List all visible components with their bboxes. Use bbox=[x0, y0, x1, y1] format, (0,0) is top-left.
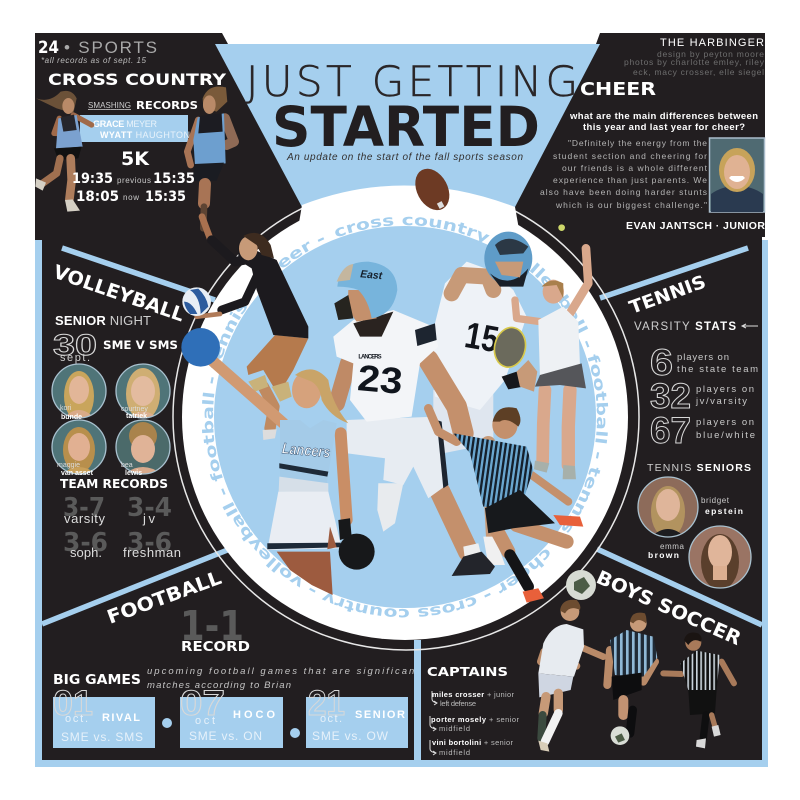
quote: which is our biggest challenge." bbox=[555, 200, 707, 210]
design credit: design by peyton moore bbox=[657, 49, 764, 59]
stat: 6 players: 6 bbox=[650, 342, 673, 383]
times: now: now bbox=[123, 193, 139, 202]
date month: sept. bbox=[60, 352, 90, 364]
heading: football: FOOTBALL bbox=[104, 567, 224, 629]
sports count: 24 bbox=[38, 38, 59, 58]
tennis player bbox=[491, 248, 588, 479]
times: previous: 19:35 bbox=[72, 171, 113, 187]
blue divider: tennis bbox=[600, 248, 748, 298]
white arc under wedge bbox=[297, 185, 520, 235]
question: what are the main differences between bbox=[569, 111, 758, 122]
player group: soccer team bbox=[538, 600, 734, 752]
headshot captions: kori bbox=[60, 405, 72, 412]
question: this year and last year for cheer? bbox=[583, 122, 745, 133]
game card: rival: 01 bbox=[53, 684, 93, 723]
stat: 67 players: players on bbox=[696, 417, 754, 428]
name: bridget epstein: bridget bbox=[701, 496, 730, 505]
record grid: jv bbox=[142, 511, 156, 526]
record grid: 3-6 bbox=[127, 528, 172, 558]
headshot captions bbox=[57, 405, 148, 477]
stat: 32 players: 32 bbox=[650, 377, 691, 416]
headshot captions: lewis bbox=[125, 470, 142, 477]
date number: 30 bbox=[53, 329, 97, 362]
times: previous: previous bbox=[117, 176, 151, 185]
stat: 6 players: players on bbox=[677, 352, 729, 363]
heading: cross country: CROSS COUNTRY bbox=[48, 70, 226, 89]
varsity stats: VARSITY STATS bbox=[634, 321, 736, 333]
name: emma brown: brown bbox=[648, 550, 679, 560]
stat: 32 players: players on bbox=[696, 384, 754, 395]
description: upcoming football games that are significant bbox=[147, 666, 419, 677]
heading: captains: CAPTAINS bbox=[427, 664, 508, 679]
blue divider: football bbox=[42, 547, 235, 624]
names bar bbox=[80, 115, 188, 142]
football player 23: East bbox=[360, 268, 383, 282]
headshot: bridget epstein bbox=[638, 477, 698, 538]
record grid: 3-7 bbox=[63, 493, 105, 523]
heading: team records: TEAM RECORDS bbox=[60, 476, 168, 491]
record grid bbox=[63, 493, 181, 560]
center photo collage bbox=[181, 163, 588, 603]
quote: our friends is a whole different bbox=[562, 163, 708, 173]
headshot captions: bea bbox=[121, 462, 133, 469]
connector dot bbox=[162, 718, 172, 728]
game card: hoco: SME vs. ON bbox=[189, 729, 262, 743]
captain: vini bortolini: midfield bbox=[439, 748, 470, 757]
times: previous: 15:35 bbox=[153, 171, 195, 187]
captain: miles crosser: miles crosser + junior bbox=[432, 690, 514, 699]
times: previous bbox=[72, 171, 195, 187]
heading: cheer: CHEER bbox=[580, 79, 656, 100]
outer ring line bbox=[173, 184, 639, 650]
blue divider: boys soccer bbox=[597, 549, 762, 625]
photo credit line 2: eck, macy crosser, elle siegel bbox=[633, 67, 764, 77]
title: started: STARTED bbox=[272, 95, 540, 159]
record grid: 3-6 bbox=[63, 528, 108, 558]
heading: tennis: TENNIS bbox=[627, 272, 709, 319]
quote: student section and cheering for bbox=[553, 151, 707, 161]
headshot captions: tatriek bbox=[126, 413, 147, 420]
senior night: SENIOR NIGHT bbox=[55, 313, 151, 328]
headshot: tatriek bbox=[116, 364, 170, 418]
soccer ball bbox=[566, 570, 596, 600]
headshot: lewis bbox=[116, 420, 170, 474]
arrow bbox=[742, 324, 758, 328]
record grid: 3-4 bbox=[127, 493, 172, 523]
sports label: • SPORTS bbox=[64, 38, 157, 57]
connector dot bbox=[290, 728, 300, 738]
blue inner circle bbox=[214, 226, 596, 608]
football player 23: 23 bbox=[356, 357, 404, 402]
title: just getting: JUST GETTING bbox=[246, 57, 578, 106]
name: emma brown bbox=[648, 542, 685, 560]
photo: evan jantsch bbox=[710, 138, 764, 212]
stat: 6 players: the state team bbox=[677, 364, 758, 375]
game card: rival bbox=[53, 684, 155, 748]
stat: 67 players: blue/white bbox=[696, 430, 755, 441]
blue divider: captains bbox=[414, 640, 421, 765]
name: bridget epstein bbox=[701, 496, 743, 516]
subtitle: An update on the start of the fall sports season bbox=[286, 152, 523, 163]
heading: boys soccer: BOYS SOCCER bbox=[593, 566, 745, 650]
player in blue stripes bbox=[607, 613, 657, 745]
times: now: 15:35 bbox=[145, 189, 186, 205]
matchup: SME V SMS bbox=[103, 338, 178, 352]
records note: *all records as of sept. 15 bbox=[41, 56, 147, 65]
captain: miles crosser: left defense bbox=[440, 699, 476, 708]
stat: 32 players bbox=[650, 377, 754, 416]
quarterback 15: 15 bbox=[462, 314, 502, 360]
cheerleader: Lancers bbox=[281, 440, 331, 462]
blue divider: volleyball bbox=[62, 248, 215, 300]
panel: football bbox=[53, 567, 419, 748]
game card: rival: oct. bbox=[65, 713, 88, 725]
smashing records: SMASHING bbox=[88, 101, 131, 110]
game card: rival: RIVAL bbox=[102, 712, 140, 724]
captain: vini bortolini: vini bortolini + senior bbox=[432, 738, 514, 747]
heading: tennis seniors: TENNIS SENIORS bbox=[647, 462, 751, 474]
football player 23 bbox=[333, 262, 495, 576]
blue header wedge bbox=[215, 44, 600, 207]
headshot captions: van asset bbox=[61, 470, 94, 477]
name: grace meyer: GRACE MEYER bbox=[93, 119, 158, 129]
headshot: emma brown bbox=[689, 526, 751, 590]
stat: 67 players: 67 bbox=[650, 410, 691, 451]
headshot: van asset bbox=[52, 420, 106, 474]
heading: volleyball: VOLLEYBALL bbox=[50, 261, 187, 326]
attribution: EVAN JANTSCH · JUNIOR bbox=[626, 220, 765, 232]
headshot captions: bunde bbox=[61, 414, 82, 421]
record grid: freshman bbox=[123, 545, 181, 560]
captain: porter mosely: midfield bbox=[439, 724, 470, 733]
quote: also have been doing harder stunts bbox=[540, 187, 707, 197]
stat: 32 players: jv/varsity bbox=[695, 396, 747, 407]
white circle bbox=[182, 194, 628, 640]
name: emma brown: emma bbox=[660, 542, 685, 551]
soccer player 8 bbox=[428, 407, 583, 603]
publication name: THE HARBINGER bbox=[660, 37, 764, 49]
captain: porter mosely bbox=[430, 715, 520, 733]
game card: hoco: oct bbox=[195, 715, 215, 727]
captain: vini bortolini bbox=[430, 738, 514, 757]
quote: "Definitely the energy from the bbox=[568, 138, 707, 148]
stat: 6 players bbox=[650, 342, 758, 383]
record label: RECORD bbox=[181, 639, 250, 655]
blue frame bbox=[35, 240, 768, 767]
headshot: bunde bbox=[52, 364, 106, 418]
quote bbox=[540, 138, 708, 210]
times: now bbox=[76, 189, 186, 205]
game card: rival: SME vs. SMS bbox=[61, 730, 143, 744]
records word: RECORDS bbox=[136, 100, 198, 112]
description: matches according to Brian bbox=[147, 680, 291, 691]
runner right bbox=[187, 86, 234, 228]
panel: boys soccer bbox=[427, 566, 745, 757]
football in the air bbox=[408, 163, 456, 216]
tennis ball bbox=[558, 224, 565, 231]
ring text: sports names: cross country - volleyball - football - tennis - cheer - cross country - volleyball - football - tennis - cheer - bbox=[202, 216, 608, 618]
game card: senior: SME vs. OW bbox=[312, 729, 389, 743]
panel: tennis bbox=[627, 272, 758, 590]
title block bbox=[246, 57, 578, 163]
question bbox=[569, 111, 758, 133]
record grid: varsity bbox=[64, 511, 106, 526]
name: wyatt haughton: WYATT HAUGHTON bbox=[100, 130, 190, 140]
name: bridget epstein: epstein bbox=[705, 506, 743, 516]
ring: bridget bbox=[638, 477, 698, 537]
player in black stripes bbox=[663, 632, 734, 748]
panel: cross country bbox=[35, 38, 234, 228]
game card: hoco bbox=[180, 684, 283, 748]
captain: miles crosser bbox=[432, 690, 514, 708]
times: now: 18:05 bbox=[76, 189, 119, 205]
heading: big games: BIG GAMES bbox=[53, 672, 141, 688]
ring: emma bbox=[689, 526, 751, 588]
photo credit line 1: photos by charlotte emley, riley bbox=[624, 57, 765, 67]
panel: credits and cheer bbox=[540, 37, 765, 232]
game card: senior: SENIOR bbox=[355, 709, 405, 721]
headshot rings bbox=[52, 364, 170, 474]
quote: experience than just parents. We bbox=[553, 175, 707, 185]
cheerleader bbox=[181, 328, 375, 595]
quarterback 15 bbox=[433, 232, 532, 565]
record grid: soph. bbox=[70, 545, 102, 560]
game card: senior: 21 bbox=[308, 684, 345, 723]
description bbox=[147, 668, 414, 690]
captain: porter mosely: porter mosely + senior bbox=[431, 715, 520, 724]
runner left bbox=[35, 91, 92, 212]
headshot captions: courtney bbox=[121, 406, 148, 413]
panel: volleyball bbox=[50, 261, 187, 560]
player in white bbox=[538, 600, 603, 752]
game card: hoco: 07 bbox=[180, 684, 225, 723]
game card: senior: oct. bbox=[320, 713, 342, 725]
headshot captions: maggie bbox=[57, 462, 80, 469]
game card: hoco: HOCO bbox=[233, 709, 275, 721]
football player 23: LANCERS bbox=[358, 354, 382, 360]
record number: 1-1 bbox=[180, 602, 244, 650]
game card: senior bbox=[306, 684, 408, 748]
stat: 67 players bbox=[650, 410, 755, 451]
volleyball player bbox=[182, 217, 308, 440]
event: 5k: 5K bbox=[121, 148, 150, 170]
